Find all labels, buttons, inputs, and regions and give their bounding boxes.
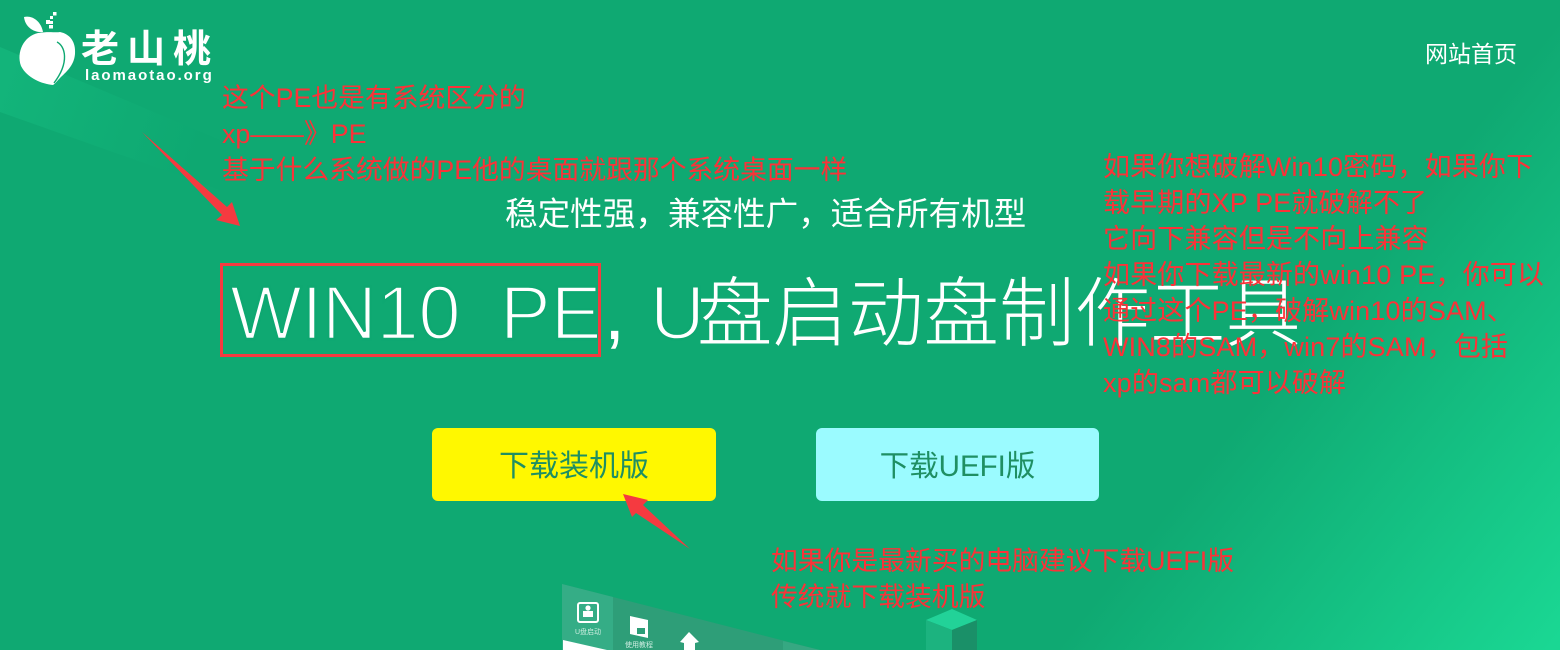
main heading: , [604,271,625,356]
button: UEFI download [816,428,1099,501]
arrow: to desktop note [142,132,240,226]
button: installer download [432,428,716,501]
main heading: WIN10 [230,271,460,356]
annotation: PE system note: 基于什么系统做的PE他的桌面就跟那个系统桌面一样 [222,155,847,185]
annotation: compatibility note [1103,152,1544,398]
app window [562,584,820,650]
main heading: 盘启动盘制作工具 [697,272,1301,356]
annotation: download advice: 如果你是最新买的电脑建议下载UEFI版 [771,546,1234,576]
button: installer download: 下载装机版 [499,450,649,483]
annotation: download advice: 传统就下载装机版 [771,582,985,612]
annotation: PE system note: xp——》PE [222,119,366,149]
subtitle: 稳定性强，兼容性广，适合所有机型 [505,195,1026,232]
annotation: PE system note [222,83,847,185]
annotation: download advice [771,546,1234,612]
annotation: compatibility note: 如果你下载最新的win10 PE，你可以 [1103,260,1544,290]
logo wordmark: 老山桃 [81,29,219,71]
icon: USB boot [575,603,601,636]
highlight box [220,263,601,357]
icon: USB boot: U盘启动 [575,627,601,636]
icon: save [625,616,653,649]
annotation: compatibility note: WIN8的SAM，win7的SAM，包括 [1103,332,1508,362]
arrow: to installer button [623,494,690,549]
annotation: compatibility note: 它向下兼容但是不向上兼容 [1103,224,1429,254]
software preview [562,584,977,650]
annotation: compatibility note: xp的sam都可以破解 [1103,368,1346,398]
cube [926,609,977,650]
logo url: laomaotao.org [85,67,214,84]
nav link: 网站首页 [1425,41,1517,67]
annotation: compatibility note: 如果你想破解Win10密码，如果你下 [1103,152,1533,182]
icon: save: 使用教程 [625,640,653,649]
annotation: PE system note: 这个PE也是有系统区分的 [222,83,526,113]
icon: peach [19,12,76,85]
icon: home [680,632,699,650]
main heading: PE [500,271,601,356]
main heading: U [650,271,705,356]
button: UEFI download: 下载UEFI版 [880,450,1035,483]
logo [19,12,219,85]
main heading [230,271,1301,356]
annotation: compatibility note: 通过这个PE，破解win10的SAM、 [1103,296,1514,326]
annotation: compatibility note: 载早期的XP PE就破解不了 [1103,188,1427,218]
